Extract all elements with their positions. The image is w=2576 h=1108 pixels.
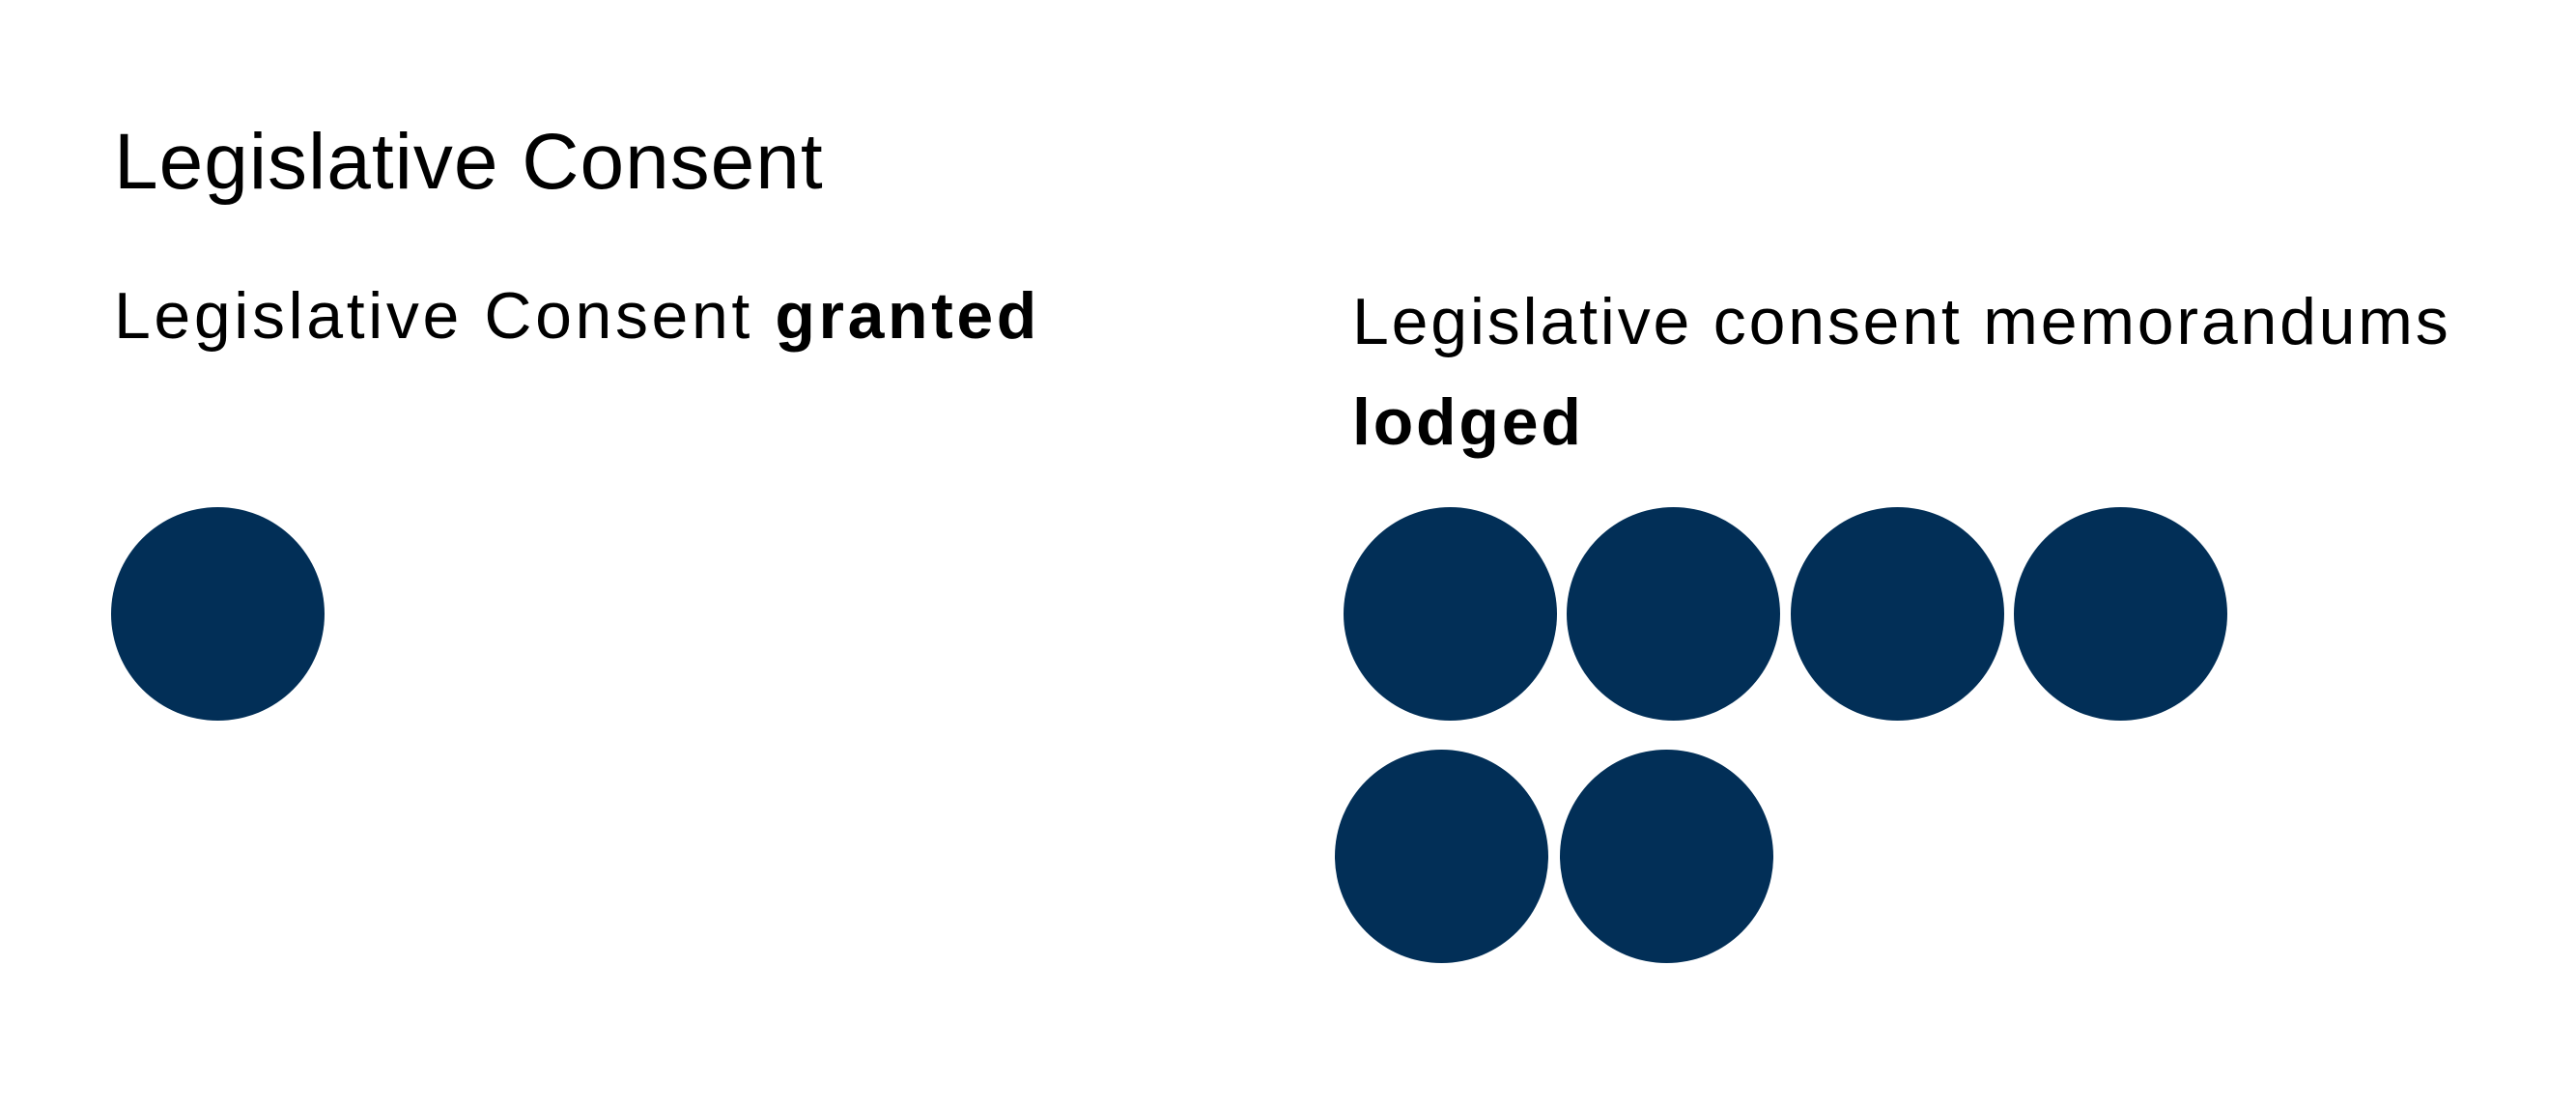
heading: memorandums lodged: [1352, 285, 2451, 459]
chart: lodged dots: [1335, 507, 2227, 963]
dot 1: [1344, 507, 1557, 721]
heading: consent granted: Legislative Consent granted: [114, 279, 1040, 353]
dot 5: [1335, 750, 1548, 963]
dot 6: [1560, 750, 1773, 963]
dot 3: [1791, 507, 2004, 721]
heading: memorandums lodged: Legislative consent memorandums: [1352, 285, 2451, 358]
chart: granted dots: [111, 507, 325, 721]
dot 4: [2014, 507, 2227, 721]
title: Legislative Consent: [114, 118, 824, 206]
heading: memorandums lodged: lodged: [1352, 385, 1584, 459]
dot: [111, 507, 325, 721]
dot 2: [1567, 507, 1780, 721]
